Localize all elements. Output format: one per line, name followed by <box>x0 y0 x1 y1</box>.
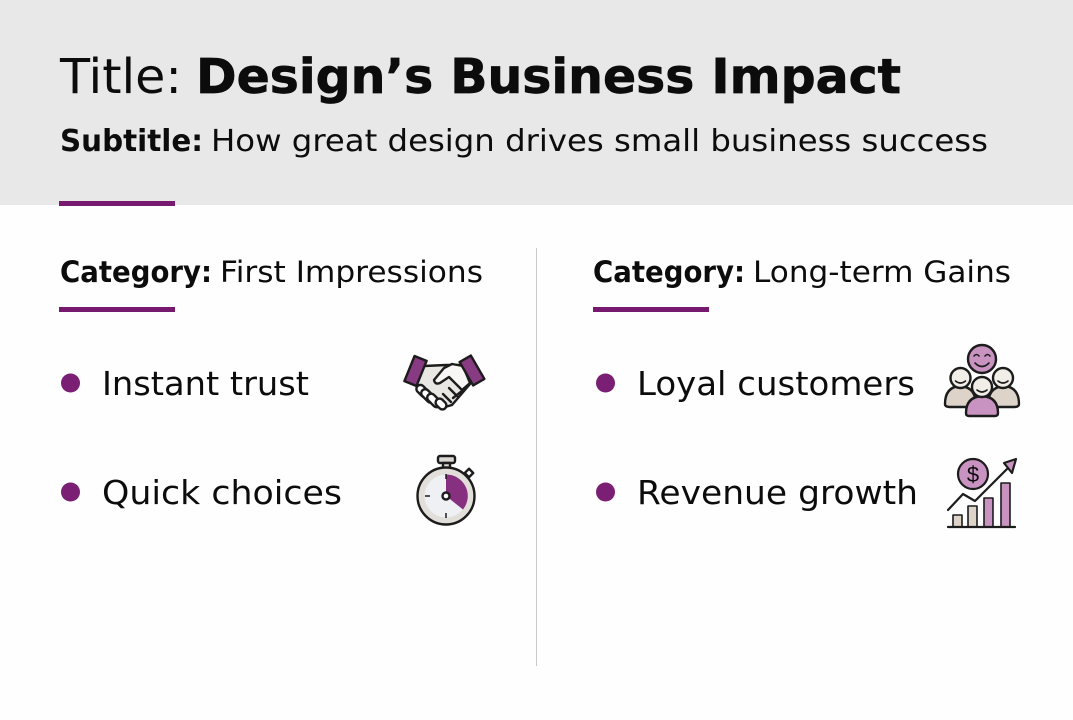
panel: long-term gains <box>593 255 1019 527</box>
category accent rule <box>593 307 709 312</box>
panel: first impressions <box>59 255 484 524</box>
header accent rule <box>59 201 175 206</box>
icon: handshake <box>404 356 484 411</box>
panel: header band <box>0 0 1073 206</box>
subtitle: How great design drives small business success <box>211 124 988 159</box>
title: Title: <box>59 49 182 105</box>
icon: revenue growth chart: $ <box>967 462 979 487</box>
category heading: long-term gains <box>593 255 1011 289</box>
icon: stopwatch <box>418 456 474 524</box>
category heading: first impressions: First Impressions <box>220 255 483 289</box>
category heading: first impressions: Category: <box>60 255 212 289</box>
bullet: loyal customers: Loyal customers <box>637 364 915 403</box>
bullet: instant trust: Instant trust <box>102 364 309 403</box>
icon: customer group <box>945 345 1019 416</box>
category accent rule <box>59 307 175 312</box>
icon: revenue growth chart <box>948 459 1016 527</box>
category heading: long-term gains: Long-term Gains <box>753 255 1011 289</box>
bullet: revenue growth: Revenue growth <box>637 473 918 512</box>
category heading: long-term gains: Category: <box>593 255 745 289</box>
category heading: first impressions <box>60 255 483 289</box>
column divider <box>536 248 537 666</box>
subtitle: Subtitle: <box>60 124 203 159</box>
title: Design’s Business Impact <box>196 49 901 105</box>
bullet: quick choices: Quick choices <box>102 473 342 512</box>
